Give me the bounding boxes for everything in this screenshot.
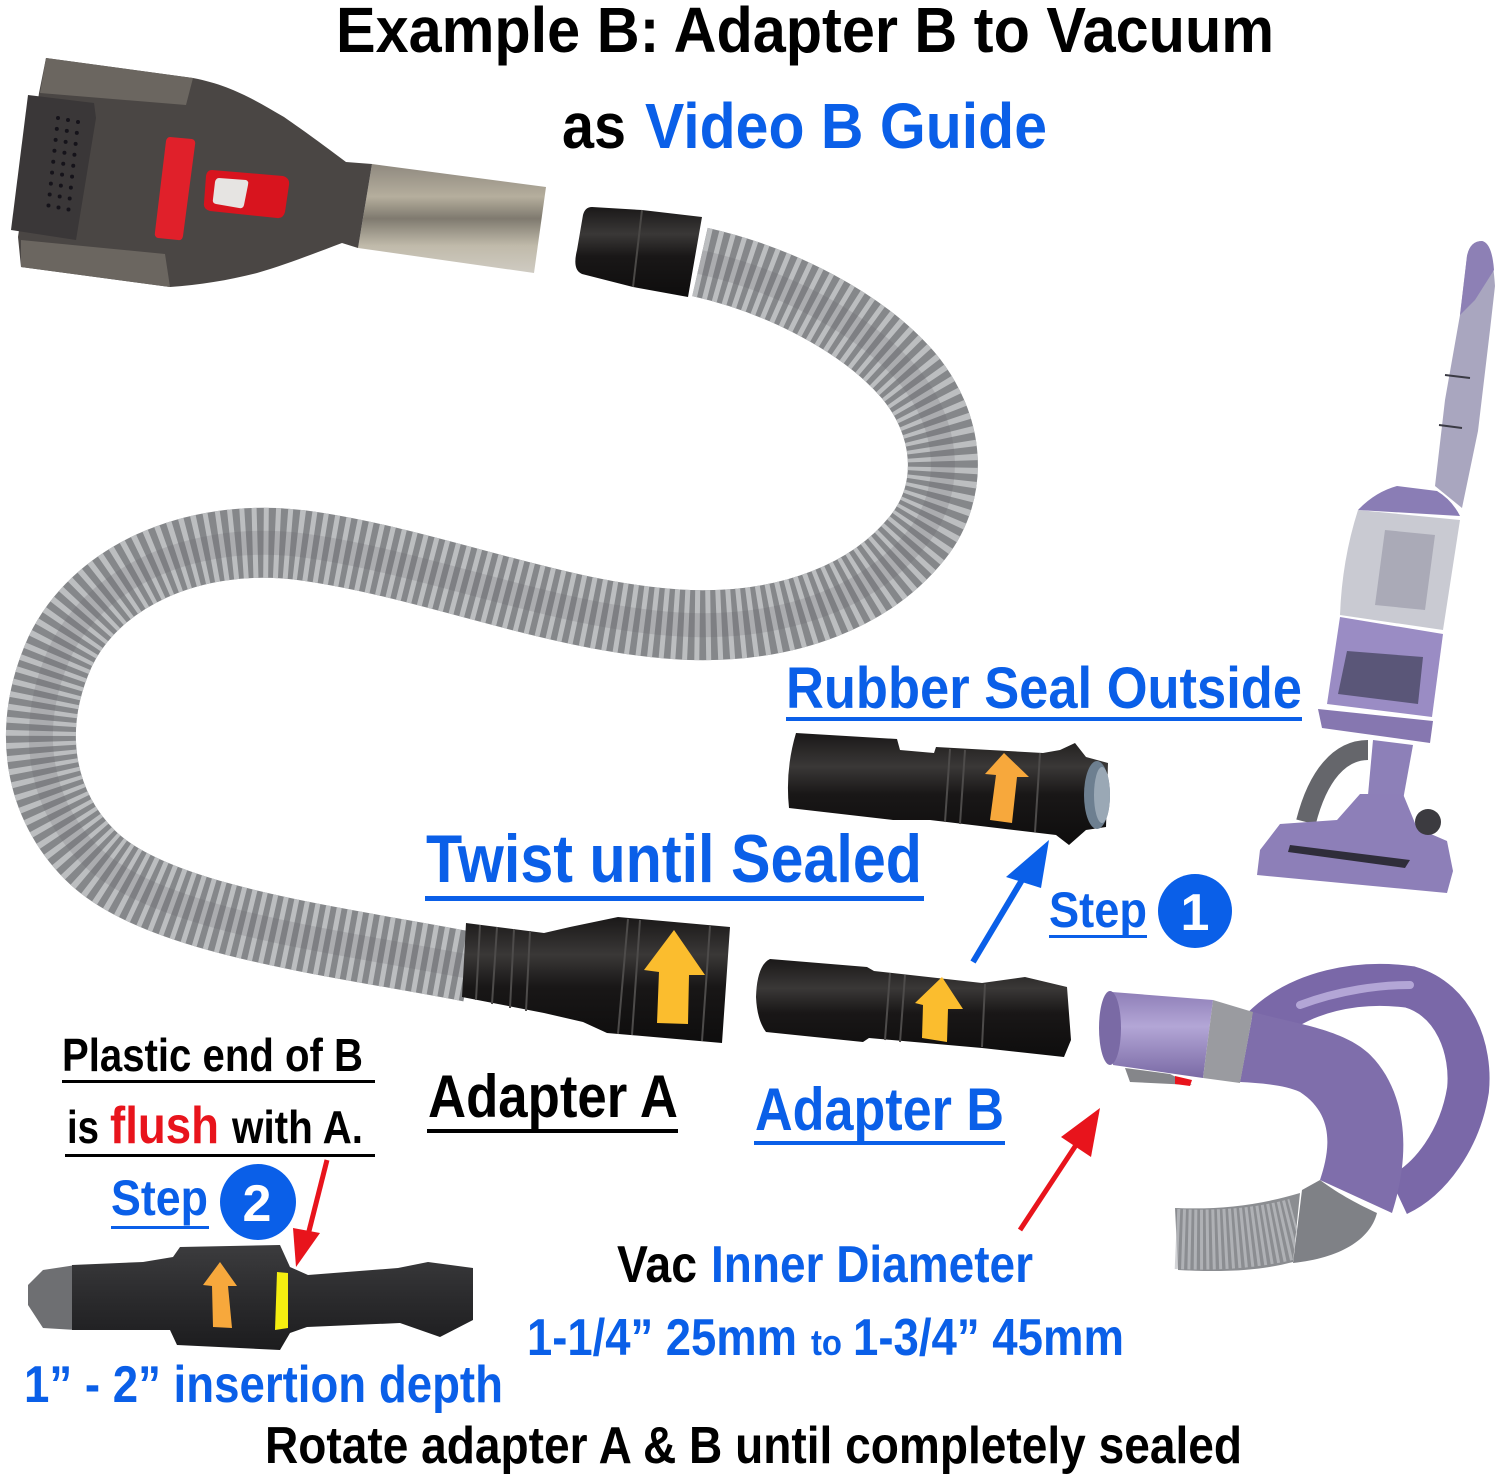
brush slot — [1288, 845, 1410, 868]
step 2: 2 — [243, 1175, 271, 1233]
loop handle — [1262, 985, 1469, 1195]
orange arrow — [985, 753, 1029, 823]
dome — [1358, 486, 1460, 516]
red button — [204, 170, 289, 218]
step 2: Step — [111, 1170, 208, 1226]
yellow arrow A — [644, 930, 705, 1024]
clear tube of nozzle — [358, 164, 546, 273]
latch — [1125, 1068, 1192, 1085]
vent panel — [11, 95, 96, 240]
insertion depth note: 1” - 2” insertion depth — [24, 1356, 503, 1414]
vacuum inner diameter note — [527, 1236, 1124, 1367]
adapter with rubber seal — [788, 733, 1110, 845]
note: plastic end flush: Plastic end of B — [62, 1029, 363, 1081]
vacuum inner diameter note: 1-1/4” 25mm — [527, 1309, 797, 1367]
title: Video B Guide — [645, 90, 1047, 162]
step 1: 1 — [1181, 884, 1209, 942]
wheel — [1415, 809, 1441, 835]
red arrow to vacuum inlet — [1020, 1108, 1100, 1230]
assembled adapters — [28, 1245, 473, 1350]
motor housing — [1327, 617, 1443, 717]
adapter A — [462, 917, 730, 1043]
label: adapter A: Adapter A — [428, 1063, 678, 1130]
title: as — [562, 90, 626, 162]
grey flexible hose — [1175, 1193, 1300, 1271]
grey side hose — [1306, 750, 1368, 822]
vacuum inner diameter note: 1-3/4” 45mm — [853, 1309, 1124, 1367]
floor head — [1257, 794, 1453, 893]
wand — [1435, 241, 1495, 508]
dust canister — [1340, 510, 1460, 630]
main elbow — [1240, 1012, 1403, 1213]
step 1: Step — [1049, 882, 1147, 938]
vacuum inner diameter note: Inner Diameter — [711, 1236, 1033, 1294]
grey elbow — [1293, 1180, 1377, 1263]
orange arrow — [203, 1262, 237, 1328]
yellow flush marker — [275, 1272, 288, 1330]
adapter B — [756, 959, 1071, 1057]
vacuum inner diameter note: to — [811, 1322, 842, 1363]
hose end cuff — [575, 207, 702, 297]
vacuum inner diameter note: Vac — [617, 1236, 697, 1294]
metal end — [1084, 761, 1110, 829]
note: plastic end flush: flush — [110, 1097, 219, 1155]
yellow arrow B — [915, 977, 963, 1042]
note: plastic end flush: with A. — [231, 1101, 363, 1153]
grey hose end — [28, 1265, 76, 1330]
heading: rubber seal outside: Rubber Seal Outside — [786, 656, 1302, 721]
neck — [1368, 740, 1413, 800]
corrugated grey hose — [41, 262, 943, 967]
nozzle body — [18, 58, 372, 287]
rotate instruction: Rotate adapter A & B until completely sealed — [265, 1417, 1242, 1475]
label: adapter B: Adapter B — [755, 1076, 1004, 1143]
heading: twist until sealed: Twist until Sealed — [426, 821, 922, 897]
base ring — [1318, 709, 1433, 743]
note: plastic end flush — [62, 1029, 375, 1157]
nozzle tool — [11, 58, 546, 287]
title — [336, 0, 1274, 162]
step 1 — [1049, 874, 1232, 948]
inlet tube — [1112, 992, 1213, 1078]
red slider — [155, 137, 195, 240]
red arrow to flush point — [293, 1160, 327, 1267]
step 2 — [111, 1164, 296, 1240]
upright vacuum — [1257, 241, 1495, 893]
vent — [1338, 651, 1423, 704]
note: plastic end flush: is — [67, 1101, 99, 1153]
blue arrow — [973, 840, 1049, 962]
purple curved hose handle — [1099, 985, 1469, 1271]
